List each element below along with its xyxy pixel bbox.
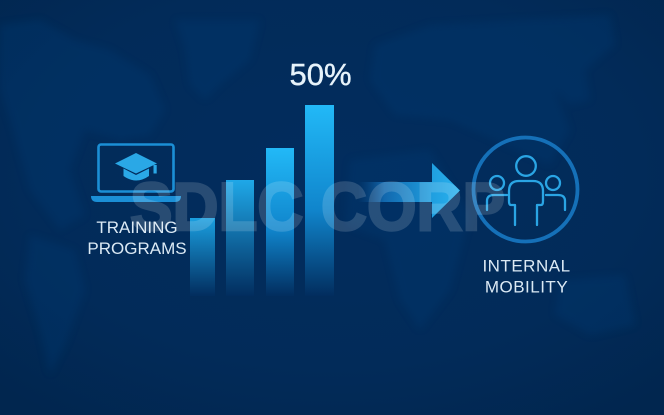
right person	[546, 176, 565, 210]
label: internal mobility: MOBILITY	[485, 278, 568, 296]
arrow	[358, 163, 460, 218]
bar 2	[226, 180, 254, 296]
label: internal mobility: INTERNAL	[482, 256, 571, 276]
bar 4	[305, 105, 334, 296]
left person	[487, 176, 507, 210]
arrow head	[432, 163, 460, 218]
value label: 50%: 50%	[289, 57, 352, 92]
label: training programs	[87, 218, 187, 258]
label: training programs: TRAINING	[96, 218, 178, 237]
graduation cap	[115, 153, 157, 180]
watermark: SDLC CORP: SDLC CORP	[130, 169, 505, 245]
label: training programs: PROGRAMS	[87, 239, 187, 258]
centre person	[509, 156, 543, 225]
circle ring	[474, 138, 578, 242]
icon: people in circle	[474, 138, 578, 242]
label: internal mobility	[482, 256, 571, 296]
bar chart	[190, 105, 334, 296]
laptop screen	[98, 144, 174, 192]
icon: laptop with graduation cap	[91, 144, 181, 202]
laptop base	[91, 196, 181, 202]
bar 1	[190, 218, 215, 296]
arrow shaft	[358, 182, 433, 202]
bar 3	[266, 148, 294, 296]
